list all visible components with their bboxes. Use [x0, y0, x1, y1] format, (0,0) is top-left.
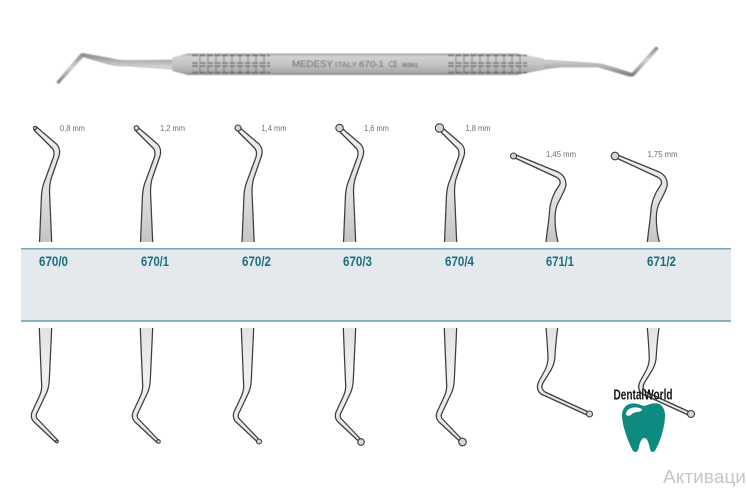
size label 1,75 mm: 1,75 mm [648, 149, 678, 159]
tool 670/1 upper tip [134, 123, 185, 242]
tool 670/4 upper tip [435, 123, 490, 242]
handle [172, 54, 545, 75]
left knurled grip [192, 55, 270, 73]
right knurled grip [448, 55, 527, 73]
tool 670/0 upper tip [33, 123, 85, 242]
size label 1,4 mm: 1,4 mm [262, 123, 286, 133]
engraved handle text: 670-1 [359, 60, 385, 69]
engraved handle text: MEDESY [292, 59, 333, 69]
right working end [545, 46, 658, 76]
model number 670/4: 670/4 [445, 253, 474, 269]
model number 670/0: 670/0 [39, 253, 68, 269]
tool 671/2 lower tip [639, 328, 694, 418]
model number 671/2: 671/2 [647, 253, 676, 269]
model number 670/3: 670/3 [343, 253, 372, 269]
logo wordmark: DentalWorld [614, 388, 672, 404]
size label 0,8 mm: 0,8 mm [60, 123, 85, 133]
tool 671/2 upper tip [611, 149, 678, 242]
size label 1,6 mm: 1,6 mm [364, 123, 389, 133]
model number 670/1: 670/1 [141, 253, 169, 269]
icon: tooth [622, 403, 665, 452]
tool 671/1 lower tip [537, 328, 592, 417]
DentalWorld logo [614, 388, 672, 452]
tool 670/0 lower tip [31, 328, 58, 443]
engraved handle text: 002551 [402, 63, 418, 69]
icon: tooth highlight [626, 407, 642, 416]
size label 1,45 mm: 1,45 mm [546, 149, 576, 159]
tool 670/4 lower tip [436, 328, 466, 446]
size label 1,2 mm: 1,2 mm [160, 123, 185, 133]
activation watermark text: Активаци [663, 467, 746, 487]
tool 671/1 upper tip [510, 149, 576, 242]
tool 670/3 lower tip [335, 328, 364, 445]
model number 671/1: 671/1 [546, 253, 574, 269]
engraved handle text: ITALY [335, 62, 357, 69]
tool 670/2 upper tip [235, 123, 286, 242]
tool 670/2 lower tip [233, 328, 262, 444]
engraved handle text [292, 59, 418, 69]
background band with model numbers [21, 249, 731, 321]
tool 670/3 upper tip [336, 123, 389, 242]
engraved handle text: CE [389, 60, 398, 69]
left working end [56, 53, 173, 84]
model number 670/2: 670/2 [242, 253, 271, 269]
size label 1,8 mm: 1,8 mm [466, 123, 490, 133]
tool 670/1 lower tip [132, 328, 160, 443]
full instrument photo [56, 46, 658, 84]
